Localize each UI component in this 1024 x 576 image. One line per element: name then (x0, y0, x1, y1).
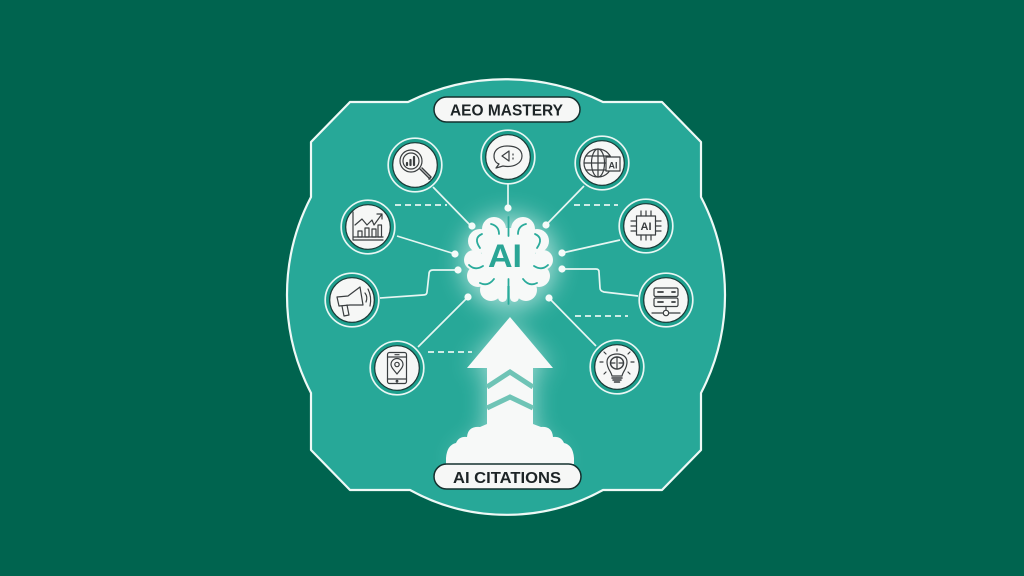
arrow rising from cloud (446, 317, 574, 464)
icon: AI globe (575, 136, 629, 190)
connector: server (562, 269, 638, 296)
connector: search (433, 187, 471, 226)
icon: speech bubble (481, 130, 535, 184)
brain with AI label (464, 217, 553, 304)
connector: globe (546, 186, 584, 225)
chevrons (487, 372, 533, 408)
connector: chip (562, 240, 620, 253)
heading pill: AEO Mastery: AEO MASTERY (450, 102, 563, 120)
connector: megaphone (380, 270, 458, 298)
connector: chart (397, 236, 455, 254)
icon: server network (639, 273, 693, 327)
icon: AI chip: AI (640, 221, 652, 233)
arrow head and shaft (467, 317, 553, 440)
connector: bulb (549, 298, 596, 346)
brain with AI label: AI (488, 238, 522, 274)
connector dots (451, 204, 566, 302)
panel: octagonal rounded badge (287, 79, 725, 515)
icon: growth chart (341, 200, 395, 254)
icon: AI globe: AI (608, 160, 618, 170)
cloud base (446, 424, 574, 464)
dashed accent lines (395, 205, 628, 352)
icon: search analytics (388, 138, 442, 192)
heading pill: AEO Mastery (434, 97, 580, 122)
connector lines (380, 184, 638, 347)
glow behind brain and arrow (450, 214, 566, 462)
icon: AI chip (619, 199, 673, 253)
heading pill: AI Citations: AI CITATIONS (453, 470, 561, 487)
heading pill: AI Citations (434, 464, 581, 489)
icon: phone with location pin (370, 341, 424, 395)
connector: phone (418, 297, 468, 347)
icon: megaphone (325, 273, 379, 327)
connector: chat (507, 184, 509, 207)
icon: lightbulb with brain (590, 340, 644, 394)
